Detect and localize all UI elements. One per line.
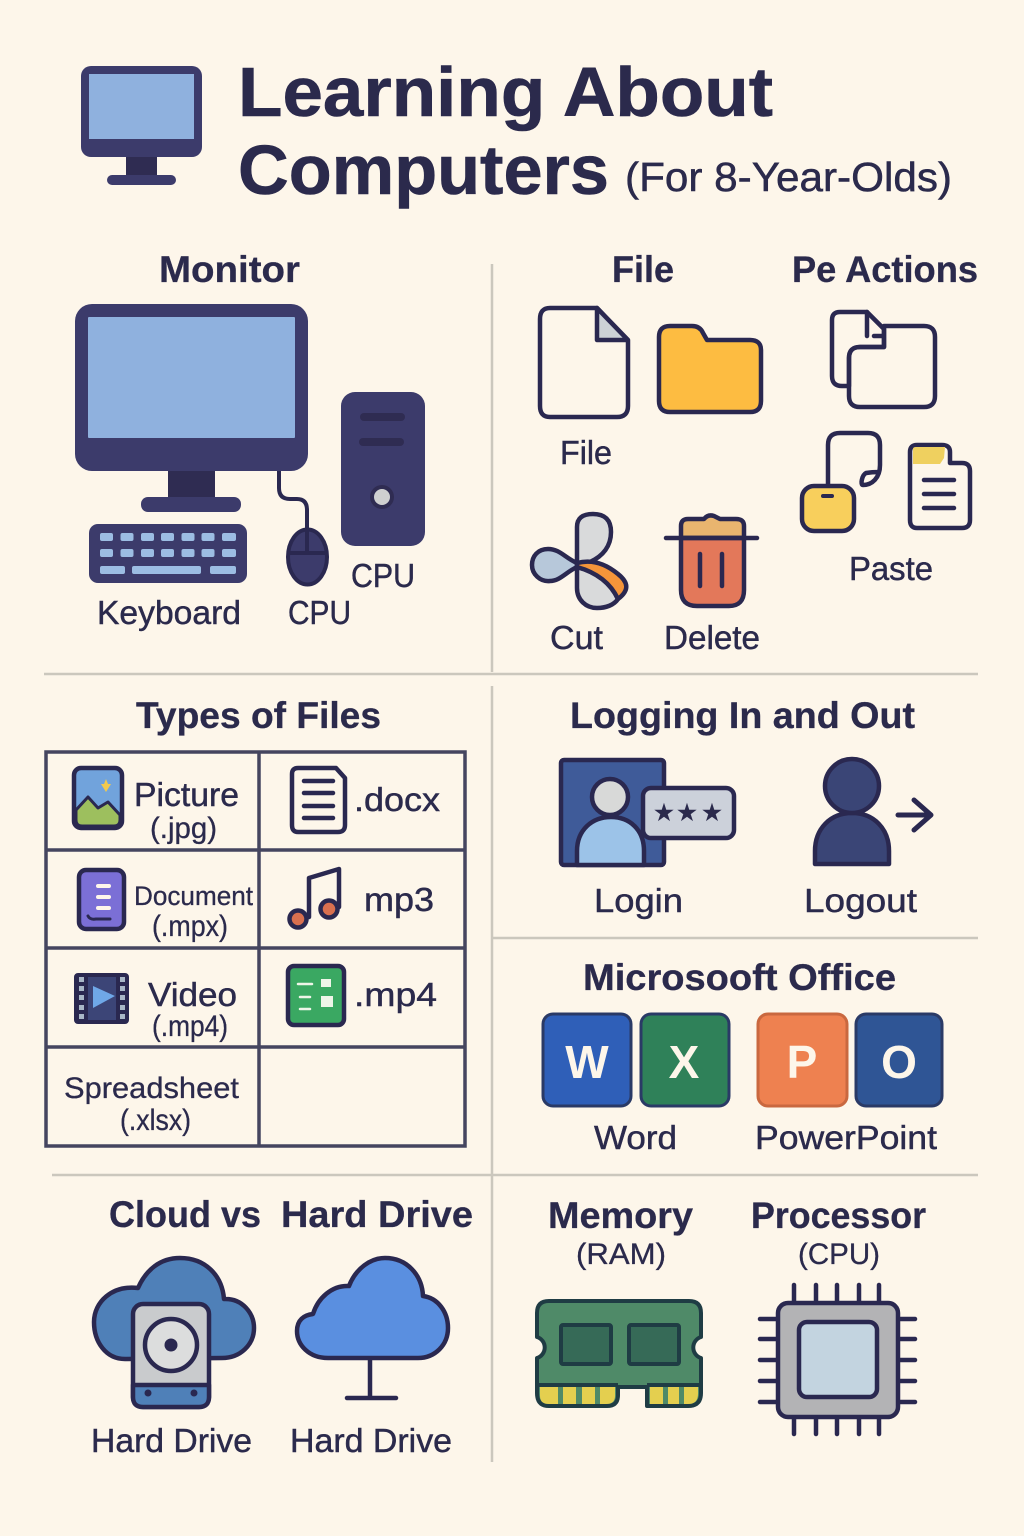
subheading: RAM: (RAM) xyxy=(576,1238,666,1271)
icon: cloud on stand xyxy=(297,1258,448,1398)
heading: Logging In and Out: Logging In and Out xyxy=(570,695,915,736)
cell: document: (.mpx) xyxy=(152,910,228,943)
cell: picture: Picture xyxy=(134,776,239,813)
panel: memory xyxy=(537,1195,701,1406)
heading: File: File xyxy=(612,249,674,290)
panel: processor xyxy=(751,1195,926,1434)
icon: header monitor xyxy=(81,66,202,185)
label: File: File xyxy=(560,434,612,471)
cell: mp3: mp3 xyxy=(364,881,434,918)
panel: actions xyxy=(792,249,978,587)
label: Keyboard: Keyboard xyxy=(97,594,241,631)
title xyxy=(238,53,952,209)
icon: copy xyxy=(832,312,935,407)
label: Logout: Logout xyxy=(804,882,917,919)
heading: Hard Drive: Hard Drive xyxy=(281,1194,473,1235)
icon: Outlook: O xyxy=(881,1036,917,1088)
label: Hard Drive left: Hard Drive xyxy=(91,1422,252,1459)
cell: video: (.mp4) xyxy=(152,1010,228,1043)
icon: login xyxy=(561,760,734,865)
label: Cut: Cut xyxy=(550,619,603,656)
icon: PowerPoint: P xyxy=(787,1036,817,1088)
icon: paste document xyxy=(910,445,970,528)
icon: login: ★ xyxy=(702,800,722,825)
cell: document: Document xyxy=(134,881,253,911)
panel: monitor and computer parts xyxy=(75,249,425,631)
panel: microsoft office xyxy=(543,957,942,1156)
icon: keyboard xyxy=(89,524,247,583)
cell: spreadsheet: Spreadsheet xyxy=(64,1072,240,1105)
icon: PowerPoint xyxy=(758,1014,847,1106)
label: Hard Drive right: Hard Drive xyxy=(290,1422,452,1459)
icon: trash can xyxy=(666,515,757,606)
cell: spreadsheet xyxy=(64,1072,240,1137)
label: Login: Login xyxy=(594,882,683,919)
cell: mp3 xyxy=(290,869,434,928)
cell: docx: .docx xyxy=(354,781,441,818)
cell: video xyxy=(74,973,237,1043)
heading: Memory: Memory xyxy=(548,1195,693,1236)
cell: picture xyxy=(74,768,239,845)
subheading: CPU: (CPU) xyxy=(798,1238,880,1271)
icon: login: ★ xyxy=(677,800,697,825)
icon: blank file xyxy=(540,308,628,417)
icon: Outlook xyxy=(856,1014,942,1106)
label: Word: Word xyxy=(594,1119,677,1156)
icon: cut xyxy=(532,514,626,608)
panel: cloud vs hard drive xyxy=(91,1194,473,1459)
label: Paste: Paste xyxy=(849,550,933,587)
icon: Excel: X xyxy=(669,1036,700,1088)
icon: folder xyxy=(659,326,761,412)
cell: mp4 spreadsheet icon: .mp4 xyxy=(354,976,437,1013)
cell: picture: (.jpg) xyxy=(150,812,217,845)
icon: computer tower xyxy=(341,392,425,546)
icon: Word: W xyxy=(565,1036,609,1088)
table grid xyxy=(46,752,465,1146)
title: Computers xyxy=(238,131,609,209)
title: (For 8-Year-Olds) xyxy=(625,154,952,200)
icon: Excel xyxy=(641,1014,729,1106)
title: Learning About xyxy=(238,53,773,131)
icon: CPU chip xyxy=(760,1285,915,1434)
icon: logout xyxy=(815,759,931,864)
panel: logging in and out xyxy=(561,695,931,919)
icon: mouse with cable xyxy=(279,471,327,584)
panel: types of files xyxy=(46,695,465,1146)
cell: spreadsheet: (.xlsx) xyxy=(120,1104,191,1137)
heading: Processor: Processor xyxy=(751,1195,926,1236)
heading: Cloud vs: Cloud vs xyxy=(109,1194,261,1235)
label: CPU below tower: CPU xyxy=(351,557,415,594)
icon: Word xyxy=(543,1014,631,1106)
icon: login: ★ xyxy=(654,800,674,825)
label: PowerPoint: PowerPoint xyxy=(755,1119,937,1156)
label: Delete: Delete xyxy=(664,619,760,656)
icon: large monitor xyxy=(75,304,308,512)
heading: Microsooft Office: Microsooft Office xyxy=(583,957,896,998)
header: title and monitor logo xyxy=(81,53,952,209)
cell: docx xyxy=(292,768,441,832)
panel: file xyxy=(532,249,761,656)
icon: cloud with hard drive xyxy=(94,1258,254,1407)
heading: Monitor: Monitor xyxy=(159,249,300,290)
cell: mp4 spreadsheet icon xyxy=(288,966,437,1025)
heading: Pe Actions: Pe Actions xyxy=(792,249,978,290)
cell: video: Video xyxy=(148,976,237,1013)
label: CPU below mouse: CPU xyxy=(288,594,351,631)
heading: Types of Files: Types of Files xyxy=(136,695,381,736)
icon: paste clipboard and tag xyxy=(802,433,880,531)
cell: document xyxy=(79,870,253,943)
icon: RAM stick xyxy=(537,1301,701,1406)
